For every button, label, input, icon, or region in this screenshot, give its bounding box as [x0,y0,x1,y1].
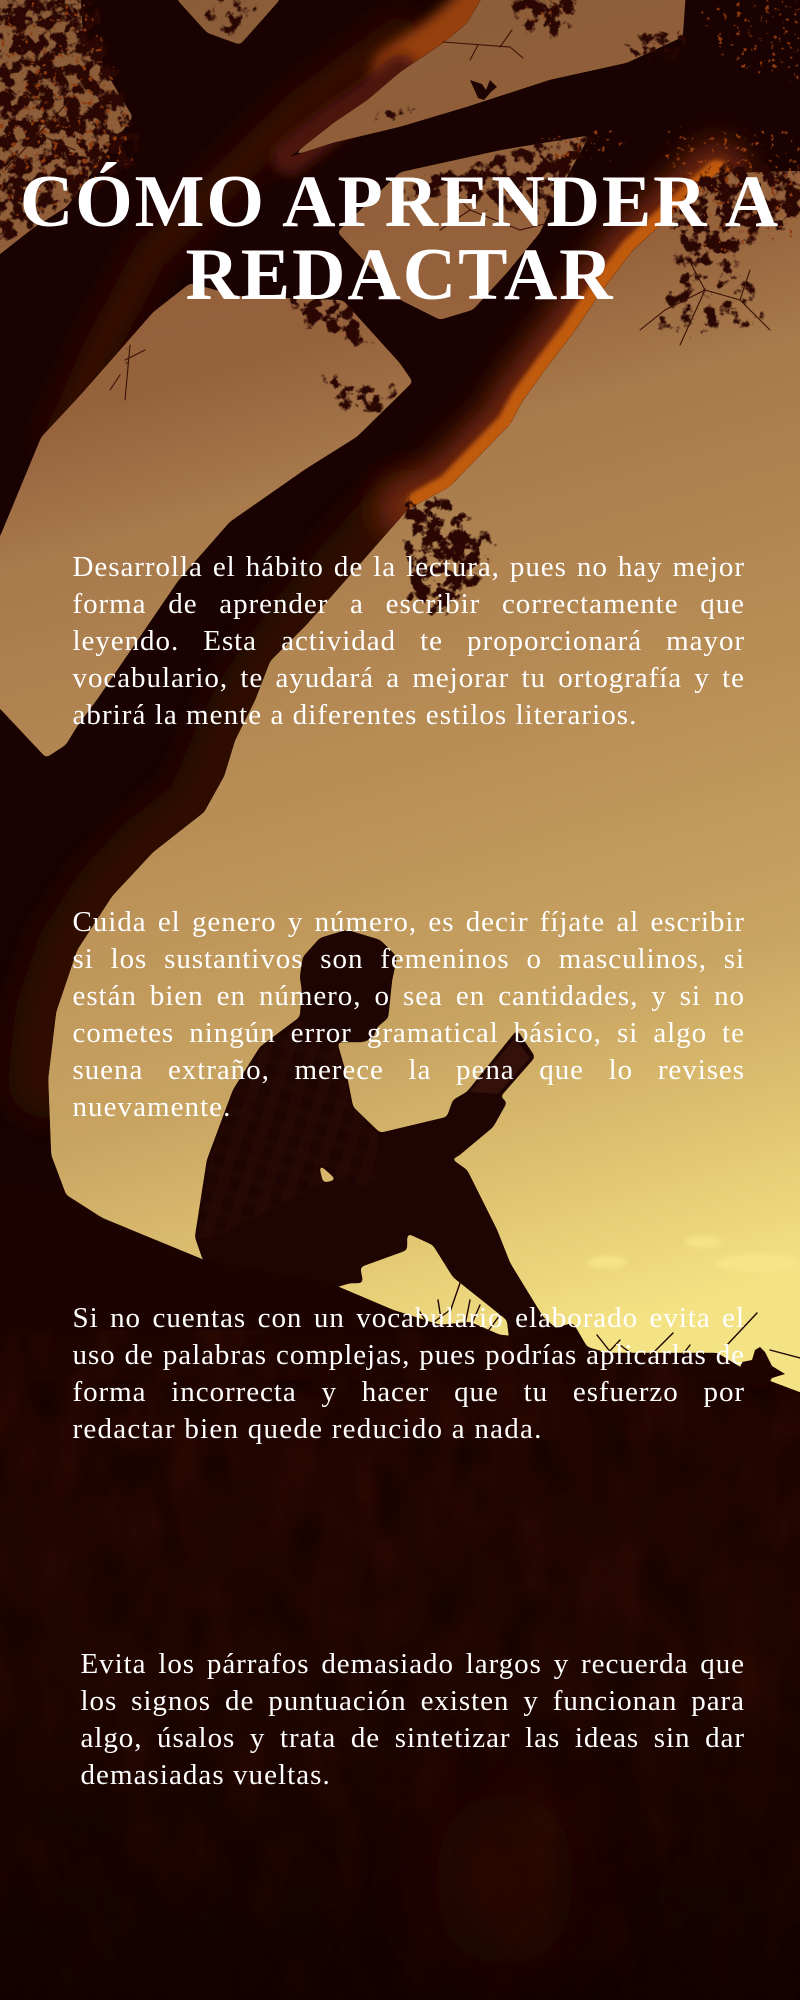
text block: vocabulary: forma incorrecta y hacer que tu esfuerzo por [72,1376,745,1408]
text block: short paragraphs [80,1648,745,1790]
text block: vocabulary: uso de palabras complejas, pues podrías aplicarlas de [72,1338,745,1370]
text block: short paragraphs: Evita los párrafos demasiado largos y recuerda que [80,1648,745,1680]
title: REDACTAR [185,234,615,316]
person: book [470,1038,530,1094]
text block: reading habit: leyendo. Esta actividad te proporcionará mayor [72,624,745,656]
text block: gender and number: están bien en número, o sea en cantidades, y si no [72,980,745,1012]
text block: gender and number: si los sustantivos son femeninos o masculinos, si [72,943,745,975]
text block: reading habit: vocabulario, te ayudará a mejorar tu ortografía y te [72,662,745,694]
text block: gender and number: nuevamente. [72,1091,231,1123]
text block: gender and number: suena extraño, merece la pena que lo revises [72,1054,745,1086]
person: silhouette [195,930,575,1345]
text block: vocabulary [72,1302,745,1444]
grass blades and small plant on the horizon [420,1283,800,1390]
text block: vocabulary: redactar bien quede reducido a nada. [72,1412,543,1444]
foliage clusters [0,0,800,626]
text block: short paragraphs: demasiadas vueltas. [80,1758,331,1790]
text block: gender and number: Cuida el genero y número, es decir fíjate al escribir [72,906,745,938]
clouds [587,1236,799,1272]
text block: short paragraphs: los signos de puntuación existen y funcionan para [80,1684,745,1716]
text block: gender and number [72,906,745,1123]
text block: reading habit [72,550,745,730]
twigs and bird-like leaf [5,30,770,400]
tree silhouette [0,0,800,1223]
ground: shading and blurred grass texture [0,1330,800,2000]
foliage highlights [0,0,800,265]
title: CÓMO APRENDER A [20,160,780,242]
ground [0,1180,800,2000]
text block: short paragraphs: algo, úsalos y trata de sintetizar las ideas sin dar [80,1722,745,1754]
person: plaid shirt [198,1020,378,1240]
text block: reading habit: Desarrolla el hábito de la lectura, pues no hay mejor [72,550,745,582]
text block: reading habit: forma de aprender a escribir correctamente que [72,588,745,620]
text block: reading habit: abrirá la mente a diferentes estilos literarios. [72,698,637,730]
title [20,160,780,316]
tree: light on branches and trunk [48,0,717,1079]
text block: vocabulary: Si no cuentas con un vocabulario elaborado evita el [72,1302,745,1334]
person reading [195,930,575,1345]
text block: gender and number: cometes ningún error gramatical básico, si algo te [72,1017,745,1049]
ground: main mass with rock and grass edge [0,1180,800,2000]
